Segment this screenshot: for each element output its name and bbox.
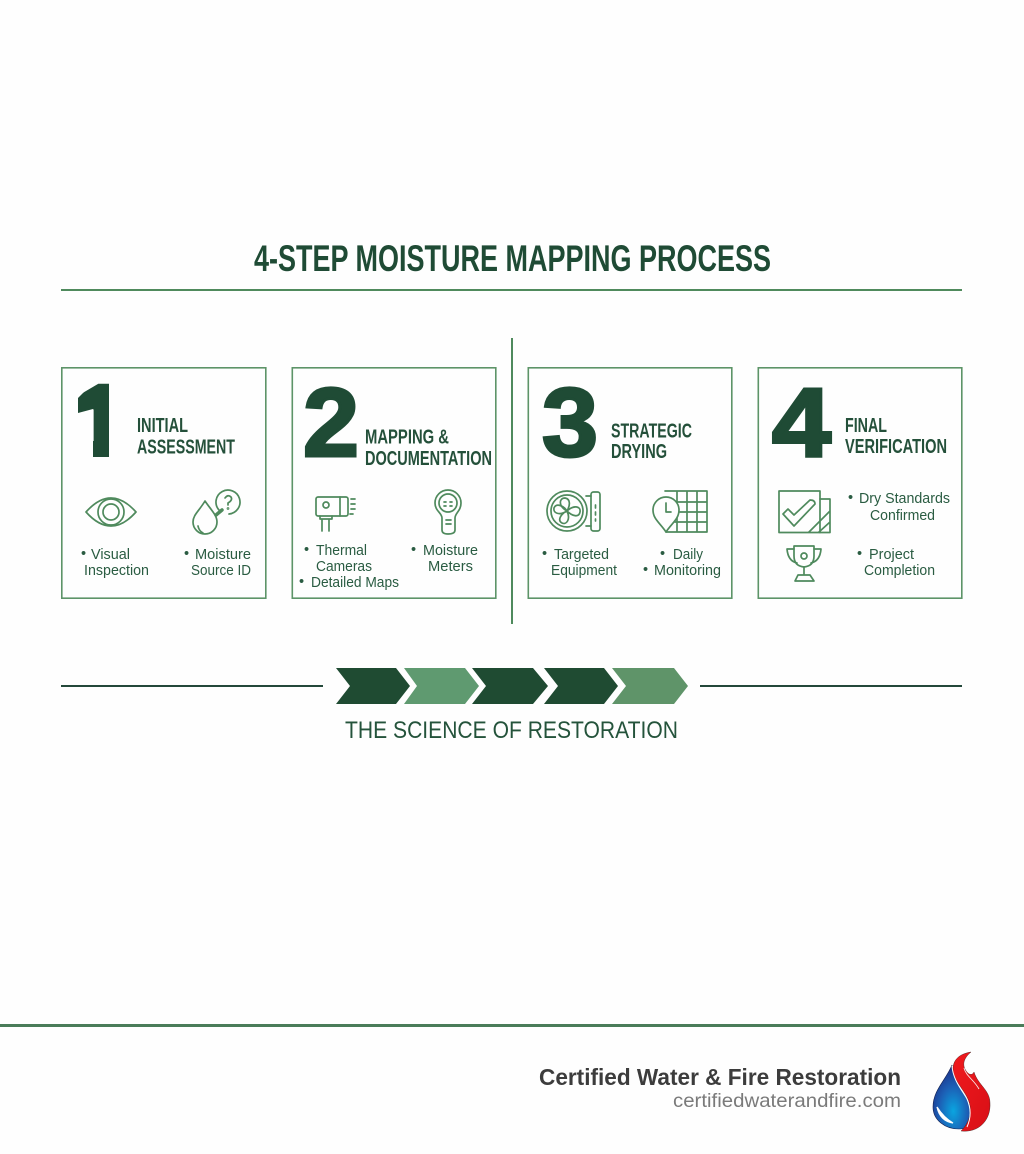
heading: strategic drying <box>611 420 692 463</box>
panel: step 3 strategic drying <box>528 368 732 598</box>
text: thermal cameras and detailed maps: • <box>299 574 304 590</box>
icon: water and fire logo <box>933 1052 990 1131</box>
text: thermal cameras and detailed maps <box>299 542 399 591</box>
heading: final verification <box>845 415 947 458</box>
text: daily monitoring <box>643 546 721 579</box>
step number 3: 3 <box>542 368 598 477</box>
text: moisture source id: Source ID <box>191 563 251 579</box>
text: visual inspection: Inspection <box>84 563 149 579</box>
text: dry standards confirmed: • <box>848 490 853 506</box>
icon: checklist <box>779 491 830 532</box>
text: visual inspection <box>81 546 149 579</box>
text: targeted equipment <box>542 546 617 579</box>
text: thermal cameras and detailed maps: • <box>304 542 309 558</box>
text: thermal cameras and detailed maps: Cameras <box>316 559 372 575</box>
text: daily monitoring: • <box>660 546 665 562</box>
panel: step 2 mapping and documentation <box>292 368 496 598</box>
heading: strategic drying: STRATEGIC <box>611 420 692 442</box>
text: thermal cameras and detailed maps: Thermal <box>316 543 367 559</box>
icon: moisture drop with question <box>193 490 240 534</box>
text: moisture meters: • <box>411 542 416 558</box>
text: dry standards confirmed: Dry Standards <box>859 491 950 507</box>
icon: thermal camera <box>316 497 355 531</box>
icon: trophy <box>787 546 821 581</box>
text: project completion <box>857 546 935 579</box>
step number 2: 2 <box>303 368 359 477</box>
text: project completion: Completion <box>864 563 935 579</box>
footer divider <box>0 1024 1024 1027</box>
text: visual inspection: Visual <box>91 547 130 563</box>
step number 1: 1 <box>74 368 134 477</box>
subtitle: THE SCIENCE OF RESTORATION <box>345 717 678 744</box>
text: moisture source id <box>184 546 251 579</box>
footer brand text: certifiedwaterandfire.com <box>673 1090 901 1112</box>
icon: moisture meter <box>435 490 461 534</box>
timeline: chevron arrows with side lines <box>61 668 962 704</box>
heading: initial assessment: ASSESSMENT <box>137 436 235 458</box>
text: dry standards confirmed <box>848 490 950 524</box>
text: dry standards confirmed: Confirmed <box>870 508 935 524</box>
text: moisture meters: Meters <box>428 559 473 575</box>
title: 4-STEP MOISTURE MAPPING PROCESS <box>254 238 771 279</box>
text: moisture meters <box>411 542 478 575</box>
footer brand text <box>539 1064 901 1112</box>
text: targeted equipment: Equipment <box>551 563 617 579</box>
icon: drying fan <box>547 491 600 531</box>
heading: final verification: VERIFICATION <box>845 436 947 458</box>
text: targeted equipment: Targeted <box>554 547 609 563</box>
text: daily monitoring: Monitoring <box>654 563 721 579</box>
step number 4: 4 <box>772 368 831 477</box>
text: project completion: Project <box>869 547 914 563</box>
heading: strategic drying: DRYING <box>611 441 667 463</box>
heading: final verification: FINAL <box>845 415 887 437</box>
text: daily monitoring: • <box>643 562 648 578</box>
panel: step 4 final verification <box>758 368 962 598</box>
heading: mapping and documentation <box>365 426 492 470</box>
icon: eye <box>86 498 136 526</box>
heading: initial assessment <box>137 415 235 458</box>
text: moisture source id: • <box>184 546 189 562</box>
heading: mapping and documentation: DOCUMENTATION <box>365 448 492 470</box>
text: moisture source id: Moisture <box>195 547 251 563</box>
footer brand text: Certified Water & Fire Restoration <box>539 1064 901 1090</box>
text: daily monitoring: Daily <box>673 547 704 563</box>
heading: mapping and documentation: MAPPING & <box>365 426 449 448</box>
heading: initial assessment: INITIAL <box>137 415 188 437</box>
panel: step 1 initial assessment <box>62 368 266 598</box>
text: project completion: • <box>857 546 862 562</box>
text: visual inspection: • <box>81 546 86 562</box>
text: moisture meters: Moisture <box>423 543 478 559</box>
text: targeted equipment: • <box>542 546 547 562</box>
text: thermal cameras and detailed maps: Detailed Maps <box>311 575 399 591</box>
icon: monitoring map pin and grid <box>653 491 707 532</box>
